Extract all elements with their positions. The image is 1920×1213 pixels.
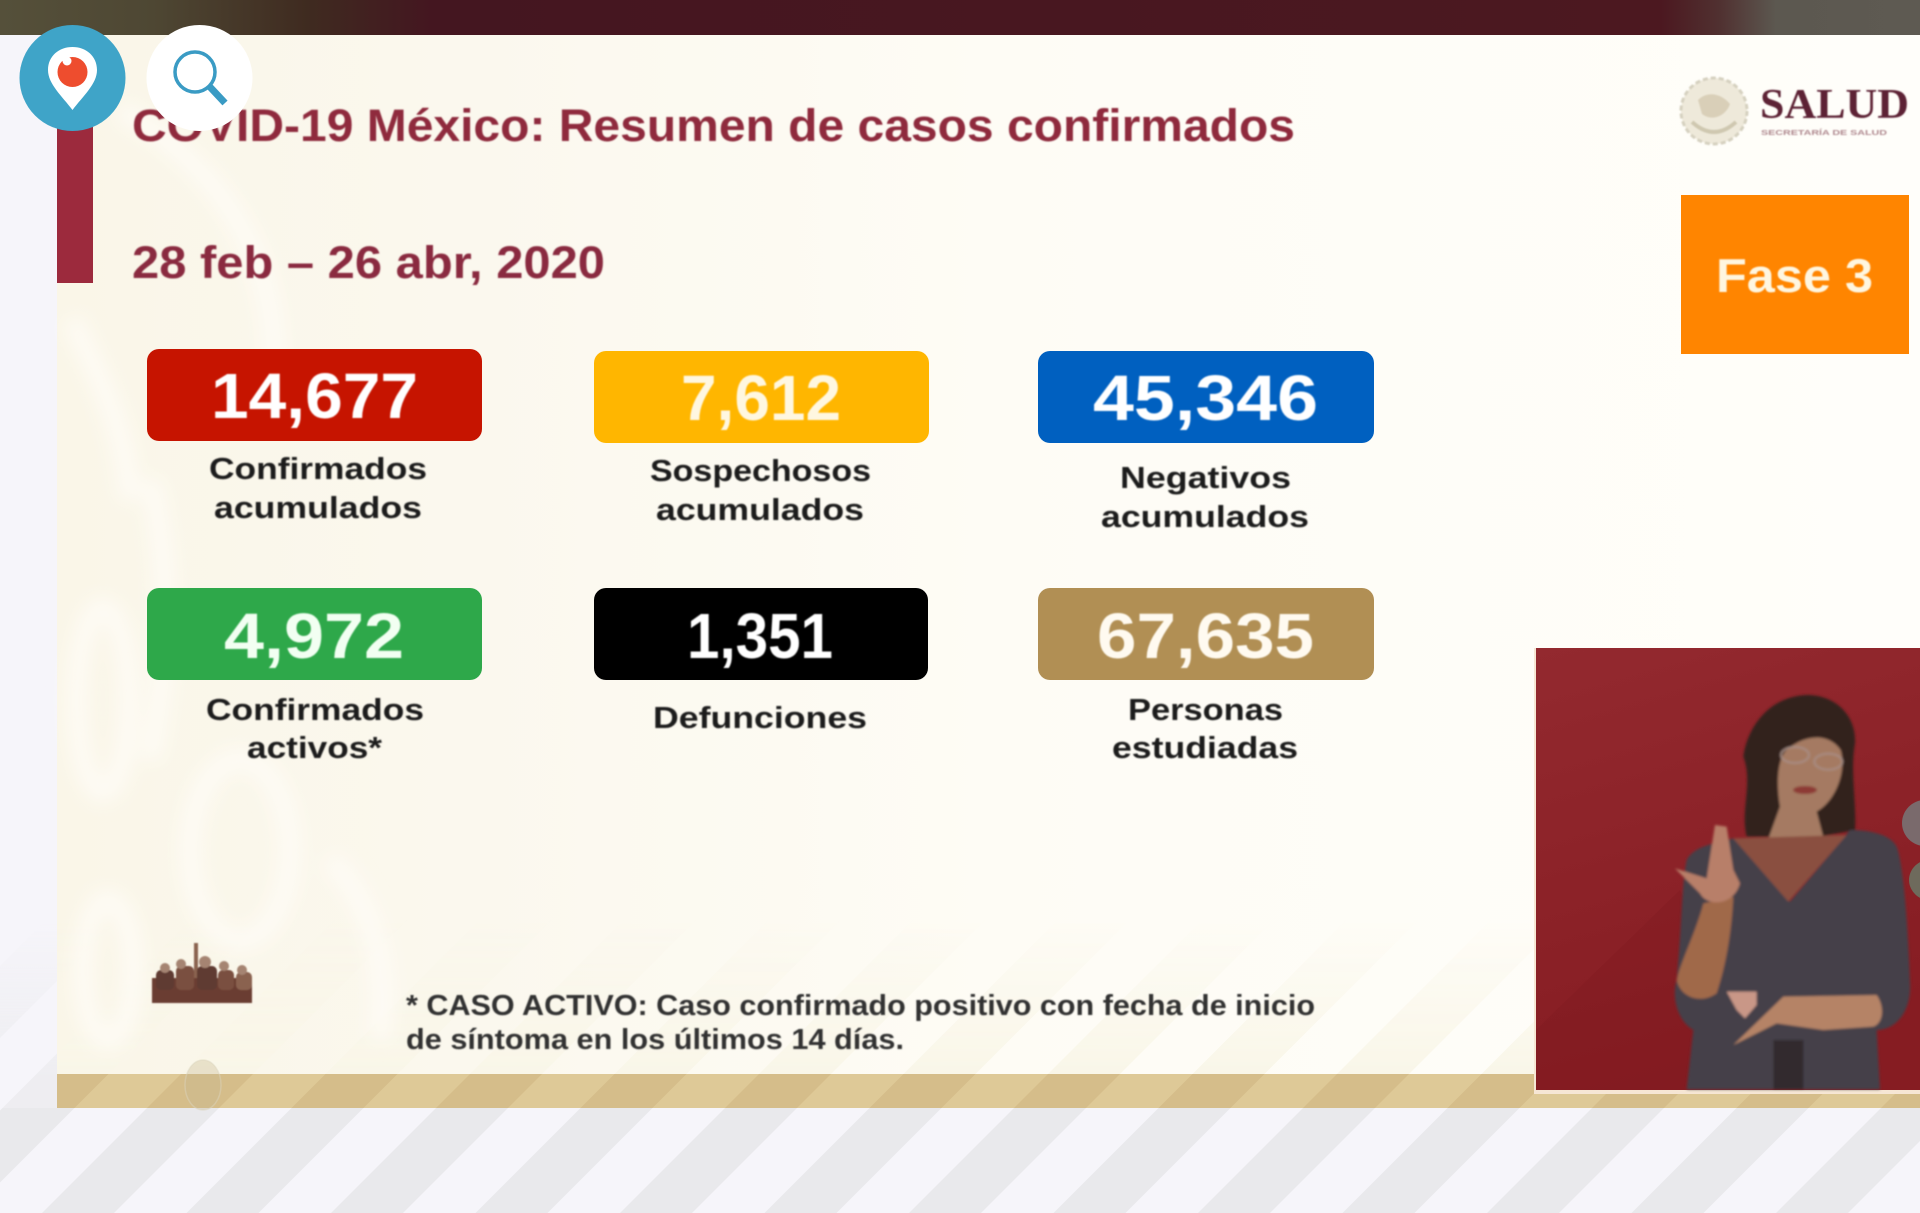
title: COVID-19 México: Resumen de casos confirmados	[132, 100, 1295, 151]
top video bar	[0, 0, 1920, 35]
stat: negativos acumulados	[1038, 351, 1374, 534]
stat: sospechosos acumulados	[594, 351, 929, 527]
date range: 28 feb – 26 abr, 2020	[132, 237, 605, 288]
stat: negativos acumulados: Negativos	[1120, 460, 1291, 495]
icon: periscope logo	[20, 25, 126, 131]
stat: personas estudiadas: 67,635	[1097, 600, 1314, 672]
stat: negativos acumulados: 45,346	[1093, 362, 1318, 434]
stat: defunciones: 1,351	[687, 600, 833, 672]
stat: personas estudiadas: estudiadas	[1112, 730, 1298, 765]
logo: Secretaría de Salud	[1681, 78, 1909, 144]
panel: sign language interpreter video	[1534, 648, 1920, 1094]
stat: confirmados acumulados	[147, 349, 482, 525]
accent bar	[57, 110, 93, 283]
side control dots	[1902, 800, 1920, 901]
stat: confirmados activos: 4,972	[224, 600, 404, 672]
stat: confirmados acumulados: 14,677	[211, 360, 418, 432]
stat: personas estudiadas	[1038, 588, 1374, 765]
stat: confirmados acumulados: Confirmados	[209, 451, 427, 486]
stat: confirmados activos: Confirmados	[206, 692, 424, 727]
stat: personas estudiadas: Personas	[1128, 692, 1283, 727]
stat: confirmados activos	[147, 588, 482, 765]
logo wordmark: SALUD	[1760, 82, 1909, 128]
badge: Fase 3	[1681, 195, 1909, 354]
body	[1675, 830, 1910, 1089]
mouth	[1793, 786, 1817, 794]
gold footer band	[57, 1074, 1920, 1108]
stat: sospechosos acumulados: Sospechosos	[650, 453, 871, 488]
lower body shadow	[1773, 1040, 1803, 1089]
logo subtitle: SECRETARÍA DE SALUD	[1761, 128, 1888, 137]
raised hand	[1675, 825, 1740, 902]
stat: negativos acumulados: acumulados	[1101, 499, 1309, 534]
stat: sospechosos acumulados: 7,612	[681, 362, 841, 434]
icon: search	[146, 25, 252, 131]
background: outer striped page	[0, 1071, 1920, 1213]
faint seal on footer band	[185, 1060, 221, 1110]
lower arm and hands	[1733, 995, 1882, 1045]
hair	[1743, 695, 1855, 837]
logo seal	[1681, 78, 1747, 144]
stat: defunciones	[594, 588, 928, 735]
stat: confirmados activos: activos*	[247, 730, 383, 765]
raised forearm	[1677, 897, 1733, 999]
footnote: caso activo	[406, 990, 1315, 1056]
footnote: caso activo: * CASO ACTIVO: Caso confirmado positivo con fecha de inicio	[406, 990, 1315, 1022]
stat: sospechosos acumulados: acumulados	[656, 492, 864, 527]
illustration: historical figures	[152, 943, 252, 1003]
face and neck	[1767, 738, 1842, 843]
stat: defunciones: Defunciones	[653, 700, 867, 735]
badge: Fase 3: Fase 3	[1716, 249, 1873, 302]
interpreter figure	[1675, 695, 1910, 1089]
stat: confirmados acumulados: acumulados	[214, 490, 422, 525]
chest V-neck skin	[1733, 835, 1847, 902]
footnote: caso activo: de síntoma en los últimos 14 días.	[406, 1024, 904, 1056]
glasses	[1781, 747, 1842, 770]
